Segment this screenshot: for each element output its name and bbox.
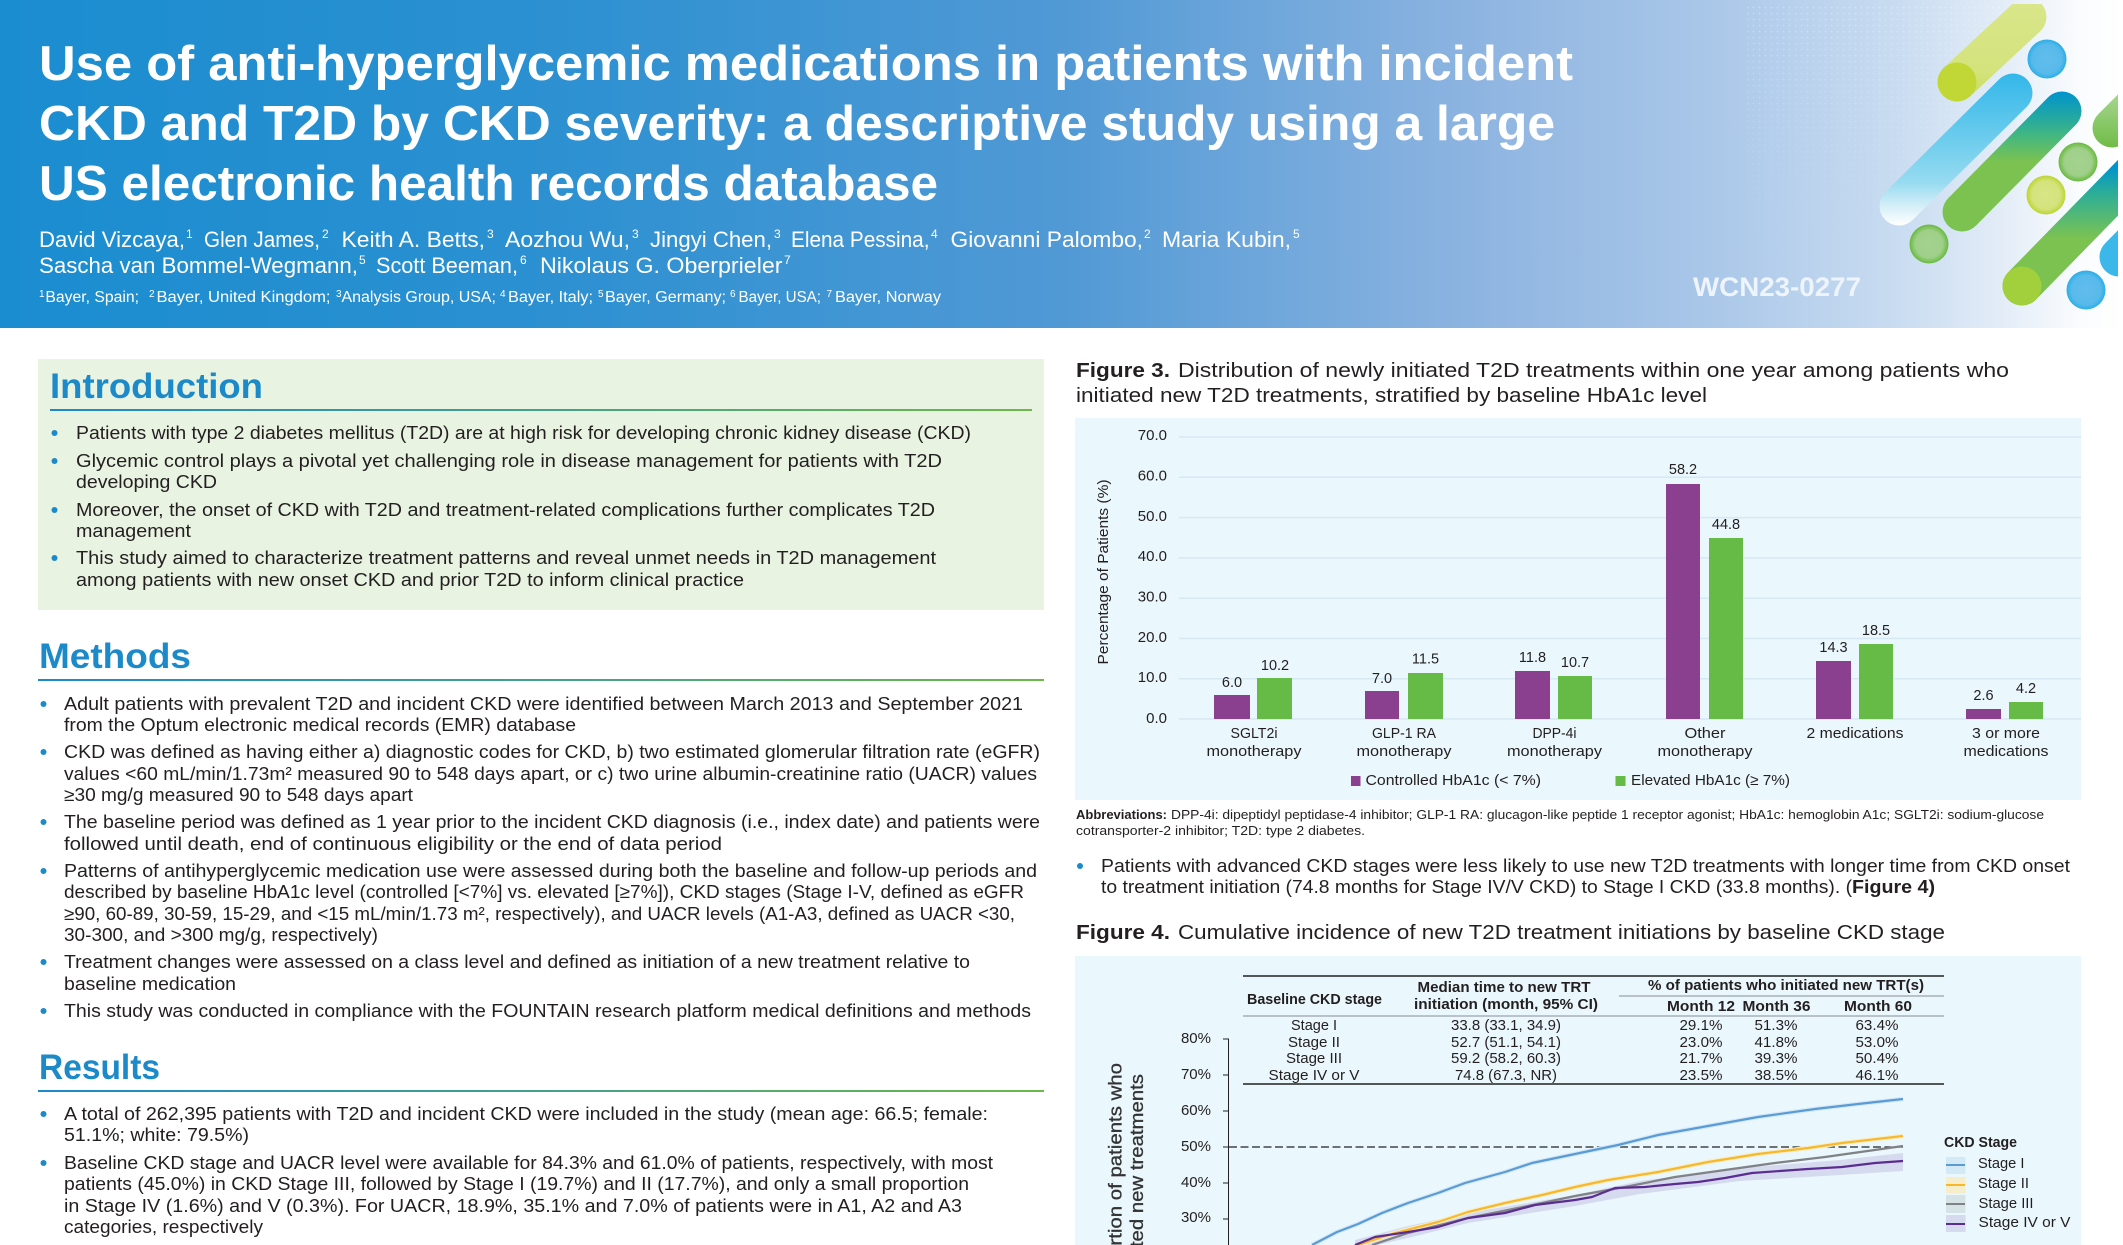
panel: figure 3 bar chart xyxy=(1075,418,2081,800)
methods bullets: values <60 mL/min/1.73m² measured 90 to 548 days apart, or c) two urine albumin-creatinine ratio (UACR) values xyxy=(64,763,1037,784)
section: results xyxy=(38,1048,1044,1237)
authors: Sascha van Bommel-Wegmann, xyxy=(39,253,358,278)
summary table: 53.0% xyxy=(1856,1035,1899,1051)
affiliations: Bayer, United Kingdom; xyxy=(156,289,330,306)
bars: 3 or more medications: 2.6 xyxy=(1973,688,1994,704)
introduction bullets: among patients with new onset CKD and prior T2D to inform clinical practice xyxy=(76,569,744,590)
bars: GLP-1 RA monotherapy: GLP-1 RA xyxy=(1372,725,1436,742)
bars: DPP-4i monotherapy xyxy=(1507,650,1603,760)
methods bullets: Patterns of antihyperglycemic medication use were assessed during both the baseline and follow-up periods and xyxy=(64,860,1037,881)
y axis labels: 50.0 xyxy=(1138,508,1167,525)
bars: 2 medications: 2 medications xyxy=(1806,725,1904,742)
affiliations: 7 xyxy=(826,289,832,300)
bars: GLP-1 RA monotherapy: 7.0 xyxy=(1372,671,1392,687)
panel: figure 4 xyxy=(1075,956,2081,1245)
authors: 1 xyxy=(186,227,193,241)
legend xyxy=(1351,772,1790,789)
figure 4 title: Figure 4. xyxy=(1076,921,1170,944)
figure 3 title xyxy=(1076,359,2009,407)
summary table: 63.4% xyxy=(1856,1018,1899,1034)
affiliations: Bayer, Norway xyxy=(835,289,941,306)
figure 3 title: initiated new T2D treatments, stratified by baseline HbA1c level xyxy=(1076,384,1707,407)
summary table: 23.5% xyxy=(1680,1068,1723,1084)
affiliations: Bayer, Germany; xyxy=(605,289,726,306)
summary table: initiation (month, 95% CI) xyxy=(1414,997,1598,1013)
figure 3 title: Distribution of newly initiated T2D treatments within one year among patients who xyxy=(1178,359,2009,382)
methods bullets: ≥90, 60-89, 30-59, 15-29, and <15 mL/min/1.73 m², respectively), and UACR levels (A1-A3, defined as UACR <30, xyxy=(64,903,1015,924)
bars: other monotherapy: Other xyxy=(1684,725,1726,742)
summary table: Stage II xyxy=(1288,1035,1340,1051)
abbreviations: DPP-4i: dipeptidyl peptidase-4 inhibitor; GLP-1 RA: glucagon-like peptide 1 receptor agonist; HbA1c: hemoglobin A1c; SGLT2i: sodium-glucose xyxy=(1171,808,2044,822)
results bullets: categories, respectively xyxy=(64,1216,264,1237)
authors: Maria Kubin, xyxy=(1162,227,1291,252)
figure 4 title: Cumulative incidence of new T2D treatment initiations by baseline CKD stage xyxy=(1178,921,1945,944)
y axis title xyxy=(1106,1063,1147,1245)
y axis: 50% xyxy=(1181,1138,1211,1155)
bars: other monotherapy xyxy=(1658,462,1753,760)
bars: SGLT2i monotherapy: 6.0 xyxy=(1222,675,1242,691)
affiliations: Bayer, USA; xyxy=(738,289,821,306)
authors: 3 xyxy=(774,227,781,241)
methods bullets: followed until death, end of continuous eligibility or the end of data period xyxy=(64,833,722,854)
summary table: 39.3% xyxy=(1754,1051,1798,1067)
results bullets: Baseline CKD stage and UACR level were available for 84.3% and 61.0% of patients, respectively, with most xyxy=(64,1152,993,1173)
title: Use of anti-hyperglycemic medications in patients with incident xyxy=(39,37,1573,91)
curve: stage I xyxy=(1312,1099,1903,1245)
introduction bullets: This study aimed to characterize treatment patterns and reveal unmet needs in T2D management xyxy=(76,547,936,568)
bars: other monotherapy: monotherapy xyxy=(1658,743,1753,760)
bars: 3 or more medications: medications xyxy=(1964,743,2048,760)
abbreviations: Abbreviations: xyxy=(1076,808,1167,822)
figure 3 title: Figure 3. xyxy=(1076,359,1170,382)
legend: Elevated HbA1c (≥ 7%) xyxy=(1631,772,1790,789)
legend: CKD stage: Stage I xyxy=(1978,1155,2024,1172)
summary table: 23.0% xyxy=(1680,1035,1723,1051)
cumulative incidence curves xyxy=(1312,1099,1903,1245)
curve: stage IV or V xyxy=(1355,1161,1903,1245)
y axis: 30% xyxy=(1181,1209,1211,1226)
summary table: % of patients who initiated new TRT(s) xyxy=(1648,978,1924,994)
authors: Jingyi Chen, xyxy=(650,227,772,252)
curve: stage III xyxy=(1372,1146,1903,1245)
summary table: 74.8 (67.3, NR) xyxy=(1455,1068,1557,1084)
y axis labels: 60.0 xyxy=(1138,468,1167,484)
bars: 2 medications: 14.3 xyxy=(1819,640,1848,656)
methods bullets: Treatment changes were assessed on a class level and defined as initiation of a new treatment relative to xyxy=(64,951,970,972)
authors: 2 xyxy=(1144,227,1151,241)
affiliations: Bayer, Italy; xyxy=(508,289,593,306)
bars: 2 medications: 18.5 xyxy=(1862,623,1890,639)
heading: results: Results xyxy=(39,1048,160,1087)
y axis labels xyxy=(1138,427,1167,727)
affiliations: 5 xyxy=(598,289,604,300)
introduction bullets: Moreover, the onset of CKD with T2D and treatment-related complications further complicates T2D xyxy=(76,499,935,520)
y axis labels: 70.0 xyxy=(1138,427,1167,444)
header banner xyxy=(0,0,2123,328)
methods bullets: described by baseline HbA1c level (controlled [<7%] vs. elevated [≥7%]), CKD stages (Stage I-V, defined as eGFR xyxy=(64,881,1024,902)
introduction bullets: Glycemic control plays a pivotal yet challenging role in disease management for patients with T2D xyxy=(76,450,942,471)
bars: other monotherapy: 44.8 xyxy=(1712,517,1740,533)
summary table: 59.2 (58.2, 60.3) xyxy=(1451,1051,1561,1067)
results bullets: 51.1%; white: 79.5%) xyxy=(64,1124,249,1145)
summary table: Stage I xyxy=(1291,1018,1337,1034)
methods bullets: ≥30 mg/g measured 90 to 548 days apart xyxy=(64,784,413,805)
bars: GLP-1 RA monotherapy xyxy=(1356,652,1452,760)
bars: GLP-1 RA monotherapy: 11.5 xyxy=(1412,652,1439,668)
y axis labels: 30.0 xyxy=(1138,588,1167,606)
panel: introduction xyxy=(38,359,1044,610)
bars: 2 medications xyxy=(1806,623,1904,742)
introduction bullets xyxy=(52,422,971,590)
methods bullets: CKD was defined as having either a) diagnostic codes for CKD, b) two estimated glomerular filtration rate (eGFR) xyxy=(64,741,1040,762)
poster number: WCN23-0277 xyxy=(1693,272,1861,302)
abbreviations xyxy=(1076,808,2044,838)
y axis: 70% xyxy=(1181,1066,1211,1083)
authors: Glen James, xyxy=(204,227,320,252)
summary table: 41.8% xyxy=(1754,1035,1798,1051)
methods bullets: This study was conducted in compliance with the FOUNTAIN research platform medical definitions and methods xyxy=(64,1000,1031,1021)
bars: DPP-4i monotherapy: 10.7 xyxy=(1561,655,1589,671)
bars: 3 or more medications: 4.2 xyxy=(2016,681,2036,697)
y axis: 60% xyxy=(1181,1102,1211,1119)
authors: 3 xyxy=(632,227,639,241)
authors: Aozhou Wu, xyxy=(505,227,630,252)
affiliations: 2 xyxy=(149,289,155,300)
authors: Giovanni Palombo, xyxy=(950,227,1143,252)
y axis: 40% xyxy=(1181,1174,1211,1191)
results bullets: patients (45.0%) in CKD Stage III, followed by Stage I (19.7%) and II (17.7%), and only a small proportion xyxy=(64,1173,969,1194)
introduction bullets: developing CKD xyxy=(76,471,217,492)
bars: GLP-1 RA monotherapy: monotherapy xyxy=(1356,743,1452,760)
abbreviations: cotransporter-2 inhibitor; T2D: type 2 diabetes. xyxy=(1076,824,1365,838)
heading: methods: Methods xyxy=(39,637,191,676)
authors: 6 xyxy=(520,253,527,267)
summary table: Month 12 xyxy=(1667,999,1735,1015)
authors: Keith A. Betts, xyxy=(342,227,485,252)
authors: Nikolaus G. Oberprieler xyxy=(540,253,782,278)
summary table: 21.7% xyxy=(1680,1051,1723,1067)
bars: SGLT2i monotherapy xyxy=(1206,658,1302,760)
y axis labels: 0.0 xyxy=(1146,710,1167,727)
affiliations: Bayer, Spain; xyxy=(45,289,139,306)
y axis xyxy=(1181,1030,1228,1245)
summary table: Baseline CKD stage xyxy=(1247,992,1382,1008)
affiliations: 1 xyxy=(39,289,45,300)
summary table: Month 60 xyxy=(1844,999,1912,1015)
bars: SGLT2i monotherapy: SGLT2i xyxy=(1230,725,1278,742)
affiliations: Analysis Group, USA; xyxy=(342,289,496,306)
summary table xyxy=(1243,976,1944,1084)
methods bullets: from the Optum electronic medical records (EMR) database xyxy=(64,714,576,735)
results bullets xyxy=(40,1103,993,1237)
results bullets: A total of 262,395 patients with T2D and incident CKD were included in the study (mean age: 66.5; female: xyxy=(64,1103,988,1124)
methods bullets: The baseline period was defined as 1 year prior to the incident CKD diagnosis (i.e., index date) and patients were xyxy=(64,811,1040,832)
methods bullets: 30-300, and >300 mg/g, respectively) xyxy=(64,924,378,945)
bars: 3 or more medications: 3 or more xyxy=(1972,725,2040,742)
authors: 2 xyxy=(322,227,329,241)
summary table: 29.1% xyxy=(1680,1018,1723,1034)
y axis labels: 10.0 xyxy=(1138,669,1167,686)
affiliations: 6 xyxy=(730,289,736,300)
section: methods xyxy=(38,637,1044,1021)
curve: stage II xyxy=(1358,1136,1903,1245)
methods bullets: baseline medication xyxy=(64,973,236,994)
introduction bullets: management xyxy=(76,520,191,541)
authors: Scott Beeman, xyxy=(376,253,518,278)
bars: 3 or more medications xyxy=(1964,681,2048,760)
bars: SGLT2i monotherapy: 10.2 xyxy=(1261,658,1289,674)
y axis labels: 20.0 xyxy=(1138,629,1167,646)
heading: introduction: Introduction xyxy=(50,367,263,406)
summary table: Stage IV or V xyxy=(1268,1068,1360,1084)
legend: CKD stage: Stage III xyxy=(1978,1195,2034,1212)
bars: SGLT2i monotherapy: monotherapy xyxy=(1206,743,1302,760)
legend: CKD stage: Stage II xyxy=(1978,1175,2029,1192)
bars: DPP-4i monotherapy: 11.8 xyxy=(1519,650,1546,666)
title xyxy=(39,37,1573,211)
results bullet: advanced CKD: Figure 4) xyxy=(1852,876,1935,897)
results bullet: advanced CKD xyxy=(1077,855,2070,897)
methods bullets: Adult patients with prevalent T2D and incident CKD were identified between March 2013 and September 2021 xyxy=(64,693,1023,714)
decorative capsule graphic xyxy=(1899,17,2123,310)
summary table: Median time to new TRT xyxy=(1418,980,1591,996)
summary table: Month 36 xyxy=(1742,999,1810,1015)
summary table: Stage III xyxy=(1286,1051,1342,1067)
summary table: 51.3% xyxy=(1754,1018,1798,1034)
summary table: 52.7 (51.1, 54.1) xyxy=(1451,1035,1561,1051)
legend: Controlled HbA1c (< 7%) xyxy=(1366,772,1541,789)
legend: CKD stage xyxy=(1944,1134,2070,1232)
bars: DPP-4i monotherapy: monotherapy xyxy=(1507,743,1603,760)
results bullet: advanced CKD: to treatment initiation (74.8 months for Stage IV/V CKD) to Stage I CKD (33.8 months). ( xyxy=(1101,876,1853,897)
affiliations: 4 xyxy=(500,289,506,300)
y axis: 80% xyxy=(1181,1030,1211,1047)
results bullets: in Stage IV (1.6%) and V (0.3%). For UACR, 18.9%, 35.1% and 7.0% of patients were in A1, A2 and A3 xyxy=(64,1195,962,1216)
summary table: 38.5% xyxy=(1754,1068,1798,1084)
bars: DPP-4i monotherapy: DPP-4i xyxy=(1532,725,1576,742)
authors: 3 xyxy=(487,227,494,241)
affiliations: 3 xyxy=(336,289,342,300)
summary table: 33.8 (33.1, 34.9) xyxy=(1451,1018,1561,1034)
summary table: 46.1% xyxy=(1856,1068,1899,1084)
y axis title: Percentage of Patients (%) xyxy=(1096,480,1112,664)
affiliations xyxy=(39,289,941,306)
title: US electronic health records database xyxy=(39,157,938,211)
authors: 5 xyxy=(1293,227,1300,241)
y axis labels: 40.0 xyxy=(1138,548,1167,565)
authors: Elena Pessina, xyxy=(791,227,930,252)
title: CKD and T2D by CKD severity: a descriptive study using a large xyxy=(39,97,1555,151)
authors: 5 xyxy=(359,253,366,267)
authors xyxy=(39,227,1300,278)
summary table: 50.4% xyxy=(1856,1051,1899,1067)
bars: other monotherapy: 58.2 xyxy=(1669,462,1697,478)
introduction bullets: Patients with type 2 diabetes mellitus (T2D) are at high risk for developing chronic kidney disease (CKD) xyxy=(76,422,971,443)
results bullet: advanced CKD: Patients with advanced CKD stages were less likely to use new T2D treatments with longer time from CKD onset xyxy=(1101,855,2070,876)
legend: CKD stage: CKD Stage xyxy=(1944,1134,2017,1151)
authors: 7 xyxy=(784,253,791,267)
legend: CKD stage: Stage IV or V xyxy=(1978,1214,2070,1231)
methods bullets xyxy=(40,693,1040,1021)
authors: 4 xyxy=(931,227,938,241)
authors: David Vizcaya, xyxy=(39,227,185,252)
